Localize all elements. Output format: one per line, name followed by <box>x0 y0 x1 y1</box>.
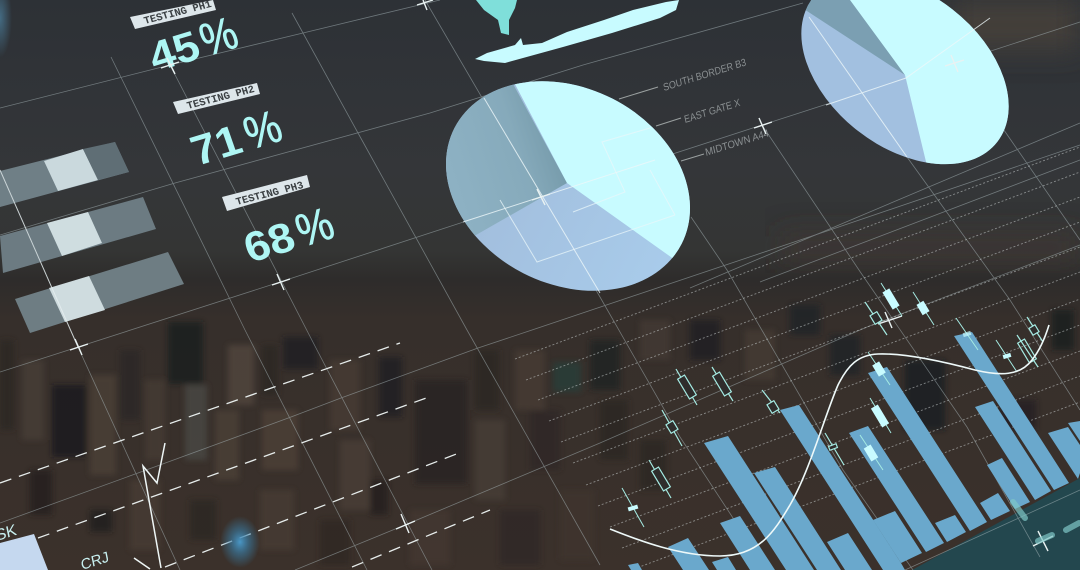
horizontal bar: row 3 <box>15 252 184 333</box>
stat: testing phase 1: % <box>193 6 244 66</box>
dashed white lines <box>0 343 490 567</box>
stat: testing phase 2: % <box>237 100 288 159</box>
stat: testing phase 3: TESTING PH3 <box>235 180 305 209</box>
horizontal bar: row 2 <box>0 197 156 273</box>
bar chart <box>628 332 1080 570</box>
pie labels: SOUTH BORDER B3 <box>662 57 747 94</box>
glowing segments bottom right <box>1013 502 1079 541</box>
pie labels <box>619 57 770 161</box>
bottom left corner box <box>0 534 48 570</box>
stat: testing phase 1 <box>130 0 244 80</box>
dotted grid lines <box>515 147 1080 569</box>
pie inner rectangles <box>500 128 675 262</box>
stat: testing phase 3: % <box>289 197 340 256</box>
stat: testing phase 3: 68 <box>237 213 301 271</box>
stat: testing phase 3 <box>222 175 340 271</box>
map: south america <box>476 0 517 35</box>
pie 2 line overlays <box>809 17 990 157</box>
pie labels: MIDTOWN A44 <box>704 128 770 159</box>
candlesticks: outlined <box>649 302 1043 498</box>
lens flare <box>220 516 260 568</box>
stat: testing phase 2: TESTING PH2 <box>186 84 256 113</box>
smooth trend curve <box>610 325 1049 556</box>
pie chart 1 <box>446 81 690 294</box>
candlesticks: filled <box>622 283 1017 527</box>
pie chart 2 <box>801 0 1009 164</box>
map: antarctica strip <box>475 0 679 63</box>
stat: testing phase 2 <box>173 83 288 174</box>
zigzag sparkline <box>134 443 165 569</box>
horizontal bar: row 1 <box>0 142 129 207</box>
pie labels: EAST GATE X <box>683 98 741 126</box>
pie line overlays <box>463 98 655 293</box>
stat: testing phase 2: 71 <box>184 116 248 174</box>
stat: testing phase 1: 45 <box>142 22 206 80</box>
grid line over bars <box>0 170 78 347</box>
